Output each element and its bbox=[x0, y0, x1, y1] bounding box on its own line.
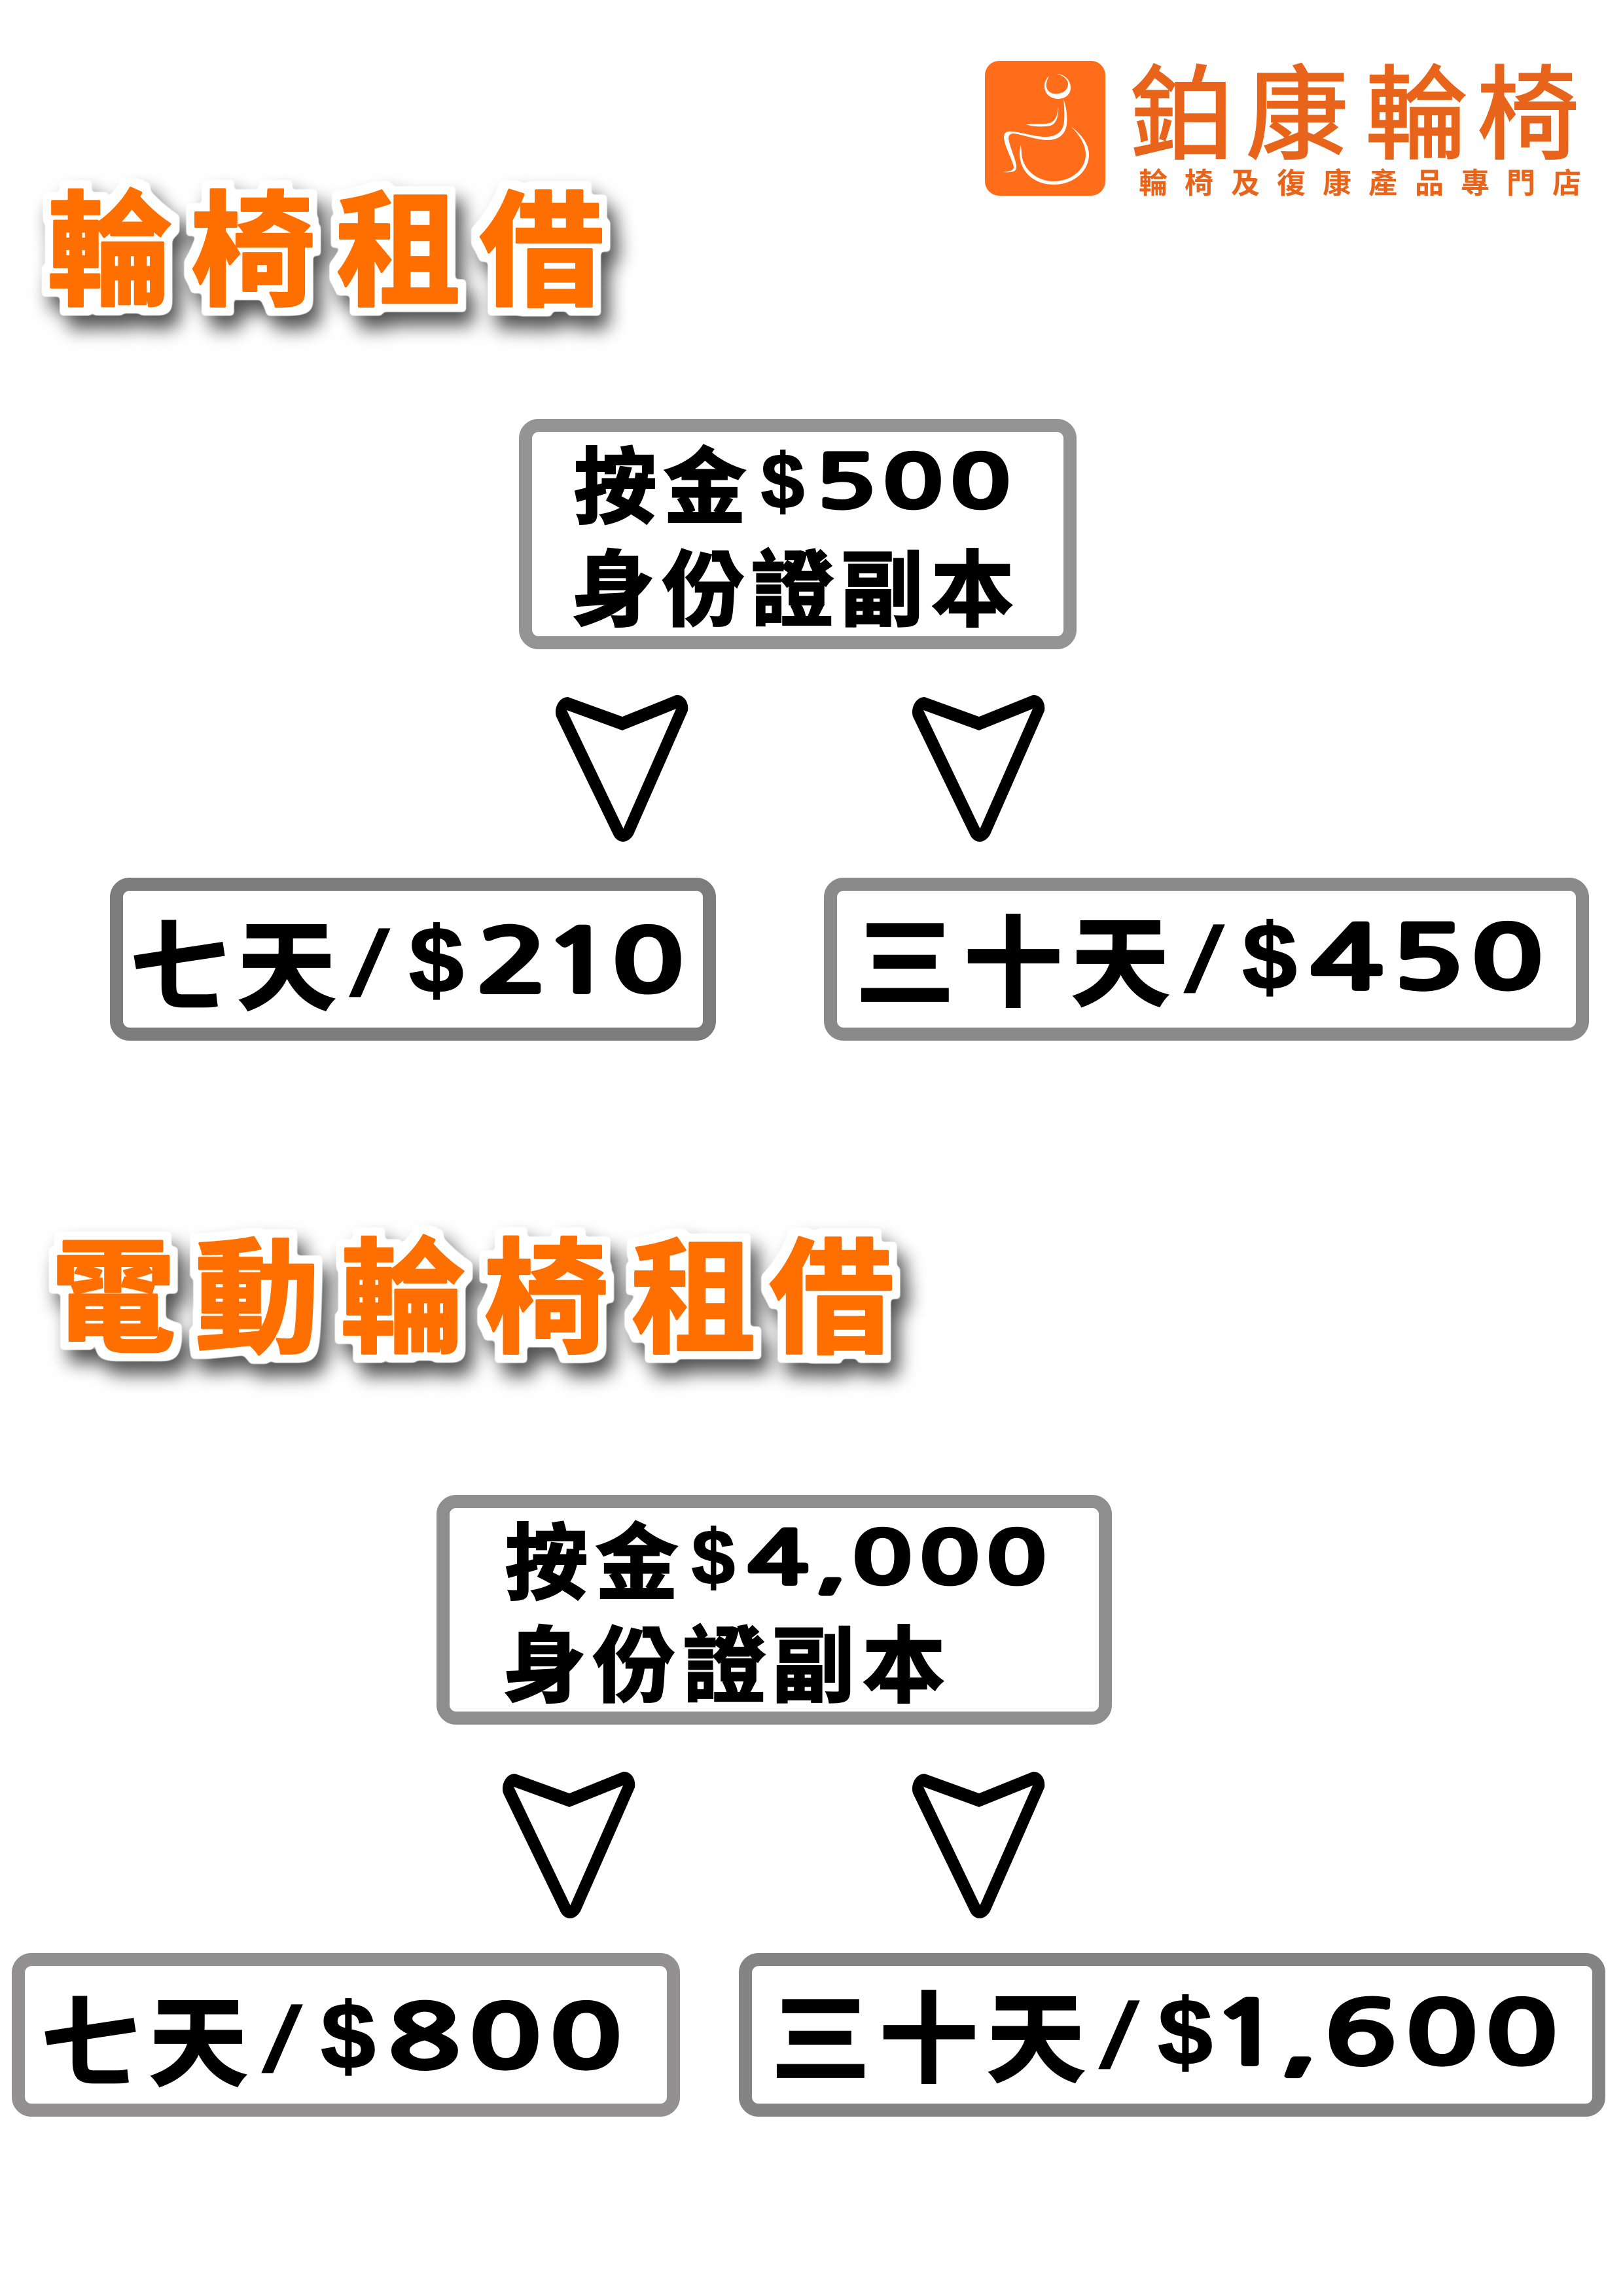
panel: seven days $800: 七天 bbox=[42, 1989, 247, 2099]
deposit line: 按金 bbox=[505, 1518, 678, 1610]
panel: seven days $210 bbox=[116, 884, 709, 1034]
panel: thirty days $1,600 bbox=[745, 1960, 1599, 2110]
logo name: 鉑康輪椅 bbox=[1130, 59, 1579, 173]
deposit line bbox=[505, 1514, 1047, 1610]
panel: thirty days $1,600: 1,600 bbox=[1211, 1992, 1558, 2078]
panel: thirty days $1,600: / bbox=[1098, 1984, 1140, 2089]
deposit line bbox=[574, 438, 1011, 534]
logo: 鉑康輪椅 bbox=[985, 59, 1581, 200]
panel: thirty days $450: $ bbox=[1242, 905, 1297, 1009]
panel: thirty days $450: 三十天 bbox=[856, 909, 1169, 1019]
arrow: to seven days bbox=[503, 1772, 635, 1918]
arrow: to thirty days bbox=[912, 695, 1044, 842]
logo tagline: 輪椅及復康產品專門店 bbox=[1139, 168, 1581, 200]
panel: seven days $800: 800 bbox=[387, 1996, 622, 2082]
panel: thirty days $1,600: $ bbox=[1158, 1980, 1213, 2085]
panel: thirty days $450 bbox=[830, 884, 1582, 1034]
panel: thirty days $450: / bbox=[1183, 908, 1225, 1013]
icon: wheelchair user on orange square bbox=[985, 61, 1105, 196]
deposit line: $ bbox=[692, 1514, 735, 1601]
deposit line: 4,000 bbox=[747, 1523, 1047, 1595]
deposit line: $ bbox=[761, 438, 804, 525]
panel: seven days $210: $ bbox=[409, 908, 464, 1013]
panel: seven days $210: / bbox=[349, 912, 391, 1016]
panel: thirty days $1,600: 三十天 bbox=[772, 1985, 1085, 2095]
deposit line: 500 bbox=[815, 447, 1011, 519]
panel: seven days $800: / bbox=[261, 1988, 303, 2092]
title: electric wheelchair rental: 電動輪椅租借 bbox=[51, 1230, 894, 1369]
panel: thirty days $450: 450 bbox=[1310, 916, 1544, 1003]
deposit line: 按金 bbox=[574, 442, 746, 534]
panel: seven days $210: 210 bbox=[476, 920, 685, 1006]
panel: seven days $800: $ bbox=[321, 1984, 376, 2089]
title: wheelchair rental: 輪椅租借 bbox=[47, 183, 604, 322]
panel: electric wheelchair deposit bbox=[443, 1501, 1105, 1718]
arrow: to thirty days bbox=[912, 1772, 1044, 1918]
ID copy line: 身份證副本 bbox=[503, 1621, 945, 1713]
panel: seven days $210: 七天 bbox=[131, 913, 336, 1023]
arrow: to seven days bbox=[556, 695, 688, 842]
panel: seven days $800 bbox=[18, 1960, 673, 2110]
panel: wheelchair deposit bbox=[526, 425, 1070, 643]
ID copy line: 身份證副本 bbox=[572, 545, 1014, 637]
